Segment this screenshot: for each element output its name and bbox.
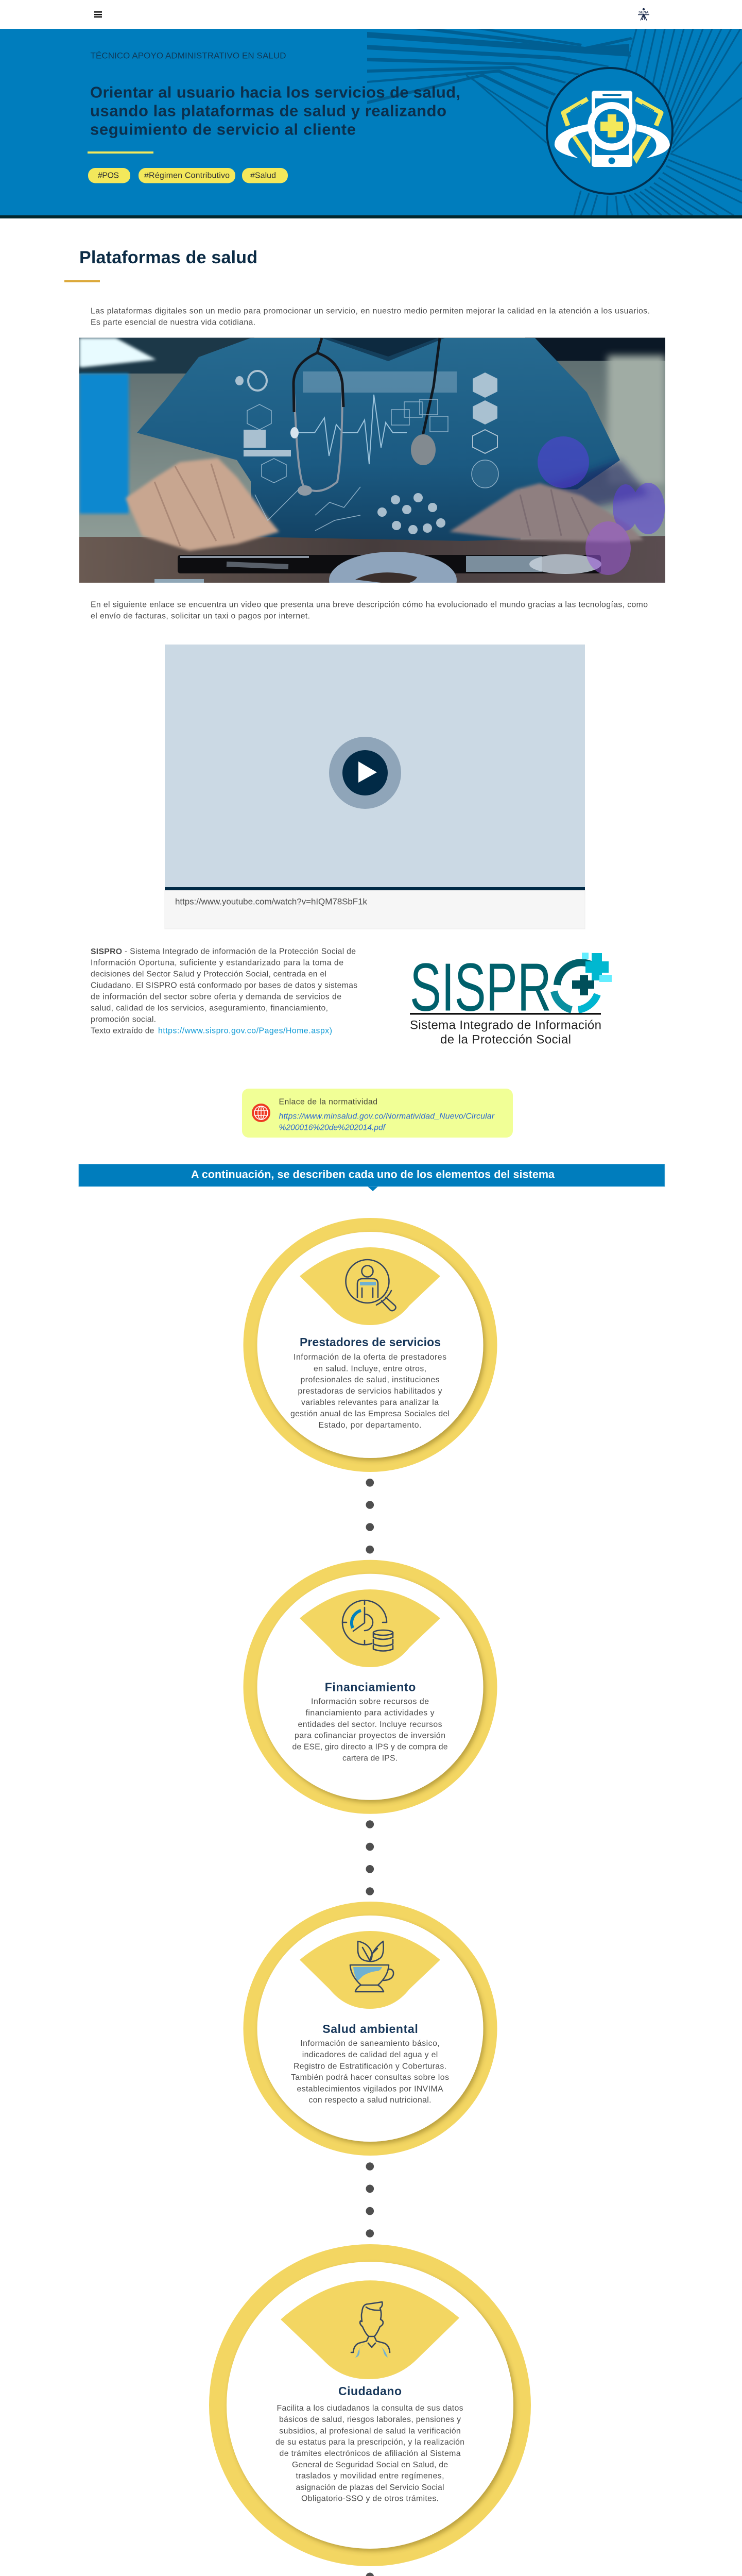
panel: Financiamiento: cartera de IPS. xyxy=(342,1754,398,1763)
title: Orientar al usuario hacia los servicios de salud, xyxy=(90,83,460,101)
tablet xyxy=(178,555,601,573)
panel: Ciudadano: subsidios, al profesional de salud la verificación xyxy=(279,2427,461,2436)
panel: Financiamiento xyxy=(243,1560,497,1814)
text: SISPRO description: Ciudadano. El SISPRO está conformado por bases de datos y sistemas xyxy=(91,981,357,990)
title: seguimiento de servicio al cliente xyxy=(90,121,356,138)
connector dots xyxy=(366,2162,374,2238)
connector dots xyxy=(366,2573,374,2576)
heading: Plataformas de salud: Plataformas de salud xyxy=(79,248,257,267)
panel: Ciudadano: Ciudadano xyxy=(338,2384,402,2398)
hands xyxy=(126,458,644,551)
icon: SENA logo: SENA xyxy=(639,11,649,14)
panel: Ciudadano: asignación de plazas del Servicio Social xyxy=(296,2483,444,2492)
hero banner xyxy=(0,29,742,218)
heading: Plataformas de salud xyxy=(64,248,257,282)
callout: enlace de la normatividad: https://www.minsalud.gov.co/Normatividad_Nuevo/Circular xyxy=(279,1112,495,1121)
panel: Financiamiento: para cofinanciar proyectos de inversión xyxy=(295,1731,445,1740)
title xyxy=(90,83,460,138)
panel: Salud ambiental: indicadores de calidad del agua y el xyxy=(302,2050,438,2059)
panel: Ciudadano: General de Seguridad Social en Salud, de xyxy=(292,2461,448,2469)
panel: Ciudadano: de trámites electrónicos de afiliación al Sistema xyxy=(279,2449,461,2458)
accent bar xyxy=(88,151,153,154)
text: SISPRO description: decisiones del Sector Salud y Protección Social, centrada en el xyxy=(91,970,326,979)
text: SISPRO description: Información Oportuna, suficiente y estandarizado para la toma de xyxy=(91,958,343,968)
panel: Ciudadano: básicos de salud, riesgos laborales, pensiones y xyxy=(279,2415,461,2424)
logo: SISPRO: SISPR xyxy=(410,949,551,1025)
top navigation bar xyxy=(0,0,742,29)
title: usando las plataformas de salud y realizando xyxy=(90,102,446,120)
text: SISPRO description: salud, calidad de los servicios, aseguramiento, financiamiento, xyxy=(91,1004,328,1013)
table xyxy=(79,536,665,583)
tags: #POS xyxy=(98,171,119,180)
text: SISPRO description: de información del sector sobre oferta y demanda de servicios de xyxy=(91,992,341,1002)
panel: Salud ambiental: Registro de Estratificación y Coberturas. xyxy=(294,2062,446,2071)
icon: globe xyxy=(252,1104,270,1122)
panel: Prestadores de servicios: en salud. Incluye, entre otros, xyxy=(314,1364,426,1373)
panel: Financiamiento: financiamiento para actividades y xyxy=(306,1708,435,1718)
panel: Ciudadano: de su estatus para la prescripción, y la realización xyxy=(275,2438,464,2447)
section banner xyxy=(79,1164,665,1191)
icon: citizen xyxy=(351,2302,390,2358)
text: SISPRO description: SISPRO - Sistema Integrado de información de la Protección Social de xyxy=(91,947,356,956)
HUD panels xyxy=(303,371,457,393)
panel: Salud ambiental: Información de saneamiento básico, xyxy=(300,2039,440,2048)
HUD hexagons xyxy=(235,371,497,534)
panel: Salud ambiental xyxy=(243,1902,497,2156)
section banner: A continuación, se describen cada uno de los elementos del sistema xyxy=(191,1168,555,1181)
panel: Salud ambiental: Salud ambiental xyxy=(322,2022,418,2036)
tags: #Régimen Contributivo xyxy=(144,171,230,180)
tags xyxy=(88,168,288,183)
decorative radiating pattern xyxy=(367,29,742,215)
icon: play button xyxy=(329,737,401,809)
panel: Ciudadano: traslados y movilidad entre regímenes, xyxy=(296,2472,444,2480)
video player xyxy=(165,645,585,929)
panel: Financiamiento: de ESE, giro directo a IPS y de compra de xyxy=(292,1742,448,1752)
text: SISPRO description xyxy=(91,947,357,1036)
panel: Prestadores de servicios: Estado, por departamento. xyxy=(318,1421,421,1430)
logo: SISPRO: de la Protección Social xyxy=(440,1032,571,1047)
text: introduction: Las plataformas digitales son un medio para promocionar un servicio, en nuestro medio permiten mejorar la calidad en la atención a los usuarios. xyxy=(91,307,650,315)
text: SISPRO description: https://www.sispro.gov.co/Pages/Home.aspx) xyxy=(158,1026,332,1036)
callout: enlace de la normatividad xyxy=(242,1089,513,1138)
panel: Prestadores de servicios xyxy=(243,1218,497,1472)
lens flares xyxy=(538,436,665,575)
panel: Ciudadano: Facilita a los ciudadanos la consulta de sus datos xyxy=(277,2404,463,2413)
text: video description xyxy=(91,601,648,620)
video url: https://www.youtube.com/watch?v=hIQM78SbF1k xyxy=(175,896,368,907)
panel: Salud ambiental: También podrá hacer consultas sobre los xyxy=(291,2073,449,2082)
text: video description: En el siguiente enlace se encuentra un video que presenta una breve descripción cómo ha evolucionado el mundo gracias a las tecnologías, como xyxy=(91,601,648,609)
text: introduction xyxy=(91,307,650,327)
callout: enlace de la normatividad: Enlace de la normatividad xyxy=(279,1097,377,1107)
icon: menu xyxy=(94,11,102,18)
panel: Prestadores de servicios: profesionales de salud, instituciones xyxy=(301,1376,440,1384)
icon: SENA logo xyxy=(638,8,649,21)
panel: Financiamiento: Financiamiento xyxy=(325,1681,416,1694)
icon: cup with leaves xyxy=(350,1941,393,1992)
stethoscope xyxy=(294,338,342,491)
panel: Prestadores de servicios: prestadoras de servicios habilitados y xyxy=(298,1387,442,1396)
tags: #Salud xyxy=(250,171,276,180)
panel: Ciudadano xyxy=(209,2244,531,2566)
text: SISPRO description: Texto extraído de xyxy=(91,1026,157,1036)
pretitle: TÉCNICO APOYO ADMINISTRATIVO EN SALUD xyxy=(91,50,286,61)
text: introduction: Es parte esencial de nuestra vida cotidiana. xyxy=(91,318,255,327)
connector dots xyxy=(366,1820,374,1895)
connector dots xyxy=(366,1479,374,1554)
panel: Prestadores de servicios: variables relevantes para analizar la xyxy=(301,1398,439,1407)
panel: Salud ambiental: con respecto a salud nutricional. xyxy=(309,2096,432,2105)
callout: enlace de la normatividad: %200016%20de%202014.pdf xyxy=(279,1123,386,1132)
text: SISPRO description: promoción social. xyxy=(91,1015,156,1024)
panel: Prestadores de servicios: gestión anual de las Empresa Sociales del xyxy=(290,1410,450,1418)
panel: Prestadores de servicios: Prestadores de servicios xyxy=(300,1335,441,1349)
panel: Prestadores de servicios: Información de la oferta de prestadores xyxy=(294,1353,446,1362)
icon: clock with coins xyxy=(342,1600,393,1651)
panel: Salud ambiental: establecimientos vigilados por INVIMA xyxy=(297,2084,443,2094)
panel: Ciudadano: Obligatorio-SSO y de otros trámites. xyxy=(301,2495,439,2503)
logo: SISPRO: Sistema Integrado de Información xyxy=(410,1018,601,1032)
hero bottom rule xyxy=(0,215,742,218)
panel: Financiamiento: entidades del sector. Incluye recursos xyxy=(298,1720,442,1729)
icon: person in magnifier xyxy=(346,1260,396,1311)
yellow arms xyxy=(563,99,661,164)
panel: Financiamiento: Información sobre recursos de xyxy=(311,1697,429,1706)
text: video description: el envío de facturas, solicitar un taxi o pagos por internet. xyxy=(91,612,310,620)
photo: doctor using medical digital interface xyxy=(79,337,665,608)
icon: phone with medical cross xyxy=(547,68,672,194)
